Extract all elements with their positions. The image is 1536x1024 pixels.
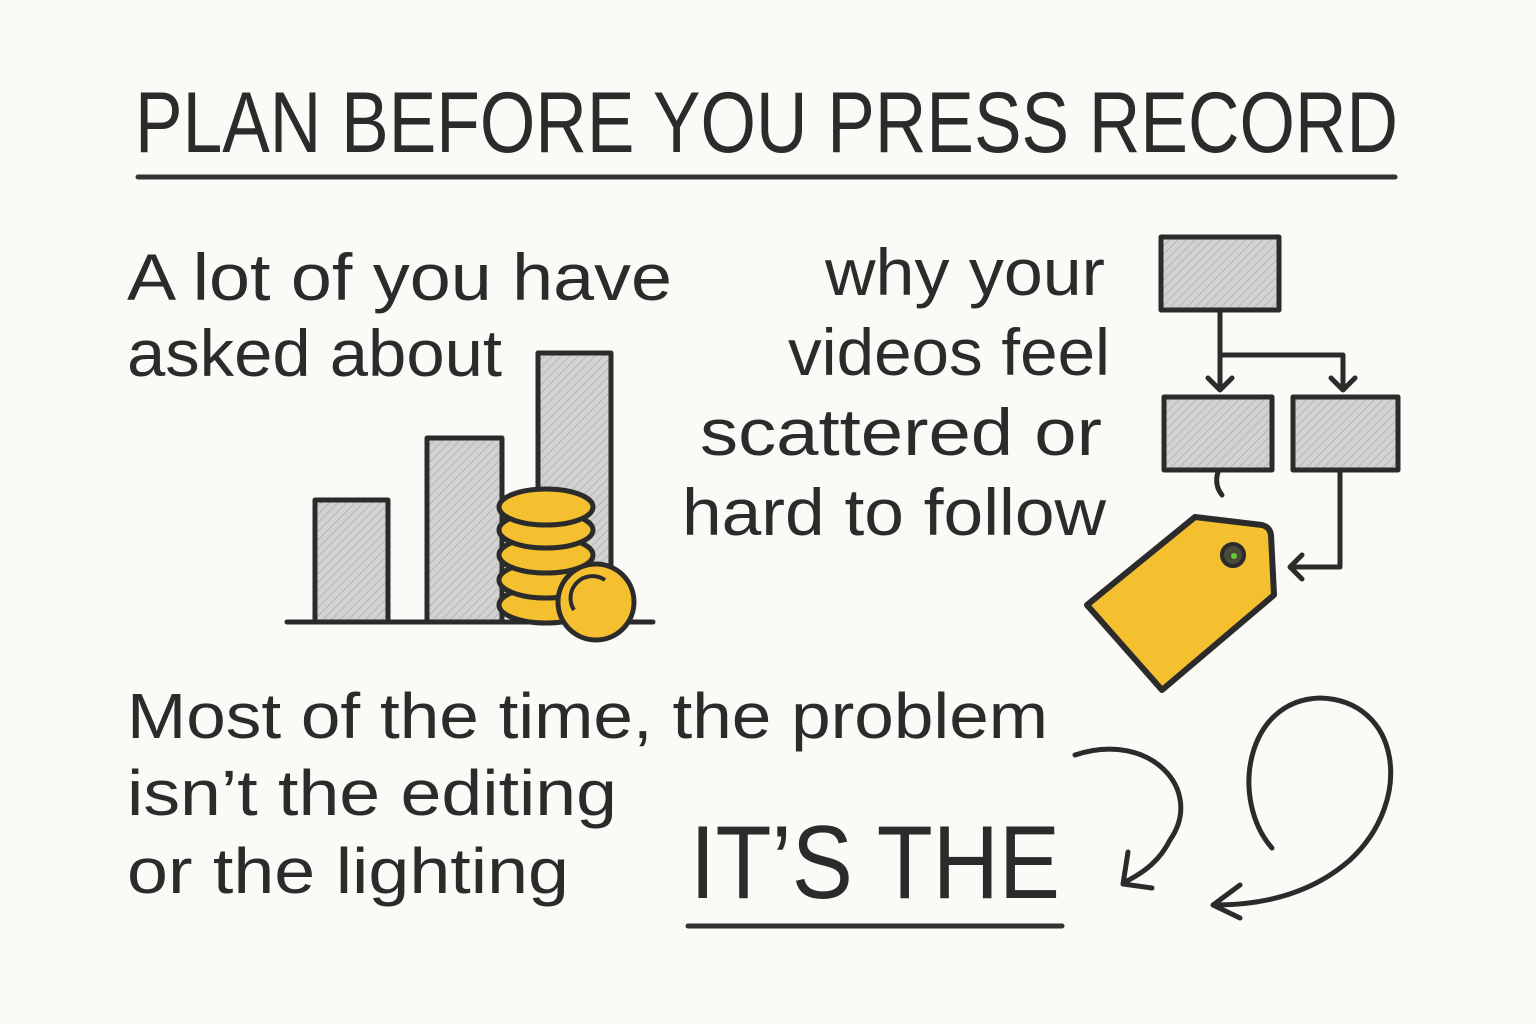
text block: why your videos [682,235,1110,549]
icon: price tag [1087,517,1274,690]
text block: intro: A lot of you have [127,240,672,314]
text block: most of the time [127,680,1048,907]
text block: intro [127,240,672,390]
text block: why your videos: scattered or [700,395,1102,469]
text block: why your videos: videos feel [788,315,1110,389]
arrows: curved [1075,698,1391,918]
text block: most of the time: isn’t the editing [127,757,617,829]
heading: it's the: IT’S THE [690,805,1060,921]
flowchart icon [1161,237,1398,579]
text block: most of the time: or the lighting [127,835,569,907]
text block: why your videos: why your [824,235,1105,309]
text block: intro: asked about [127,316,502,390]
bar chart with coins [287,353,653,640]
text block: most of the time: Most of the time, the problem [127,680,1048,752]
icon: coins [499,489,634,640]
text block: why your videos: hard to follow [682,475,1106,549]
